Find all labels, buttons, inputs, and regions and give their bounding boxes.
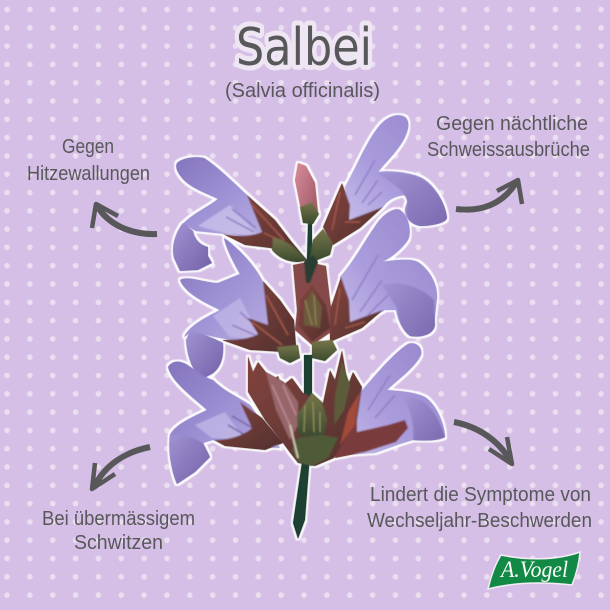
label: Bei übermässigem Schwitzen (42, 508, 195, 554)
flower: bottom left (168, 362, 283, 484)
label: Gegen nächtliche Schweissausbrüche: Schweissausbrüche (427, 139, 590, 161)
label: Bei übermässigem Schwitzen: Schwitzen (74, 532, 163, 554)
logo: A.Vogel: A.Vogel (499, 557, 568, 582)
label: Lindert die Symptome von Wechseljahr-Beschwerden: Lindert die Symptome von (370, 484, 591, 506)
flower bud (295, 163, 319, 224)
label: Gegen nächtliche Schweissausbrüche (427, 113, 590, 161)
logo: A.Vogel (488, 552, 580, 589)
arrow: to Schweissausbrüche (456, 180, 522, 210)
flower: bottom right (335, 343, 445, 458)
sage plant (168, 115, 447, 539)
flower: middle right (312, 209, 437, 361)
stem (293, 222, 312, 539)
flower: top left (173, 157, 307, 271)
flower: middle left (180, 238, 300, 378)
label: Bei übermässigem Schwitzen: Bei übermässigem (42, 508, 195, 530)
title: Salbei (236, 18, 372, 78)
label: Lindert die Symptome von Wechseljahr-Beschwerden (367, 484, 592, 532)
label: Gegen Hitzewallungen: Hitzewallungen (27, 163, 150, 185)
label: Gegen nächtliche Schweissausbrüche: Gegen nächtliche (436, 113, 588, 135)
label: Gegen Hitzewallungen: Gegen (62, 136, 114, 158)
label: Gegen Hitzewallungen (27, 136, 150, 185)
arrow: to übermässigem Schwitzen (92, 447, 150, 489)
subtitle: (Salvia officinalis) (225, 80, 380, 102)
flower: top right (310, 115, 447, 261)
arrow: to Wechseljahr-Beschwerden (454, 422, 512, 464)
center calyx (293, 255, 334, 345)
arrow: to Hitzewallungen (92, 204, 157, 234)
bottom calyx cluster (248, 350, 362, 466)
label: Lindert die Symptome von Wechseljahr-Beschwerden: Wechseljahr-Beschwerden (367, 510, 592, 532)
